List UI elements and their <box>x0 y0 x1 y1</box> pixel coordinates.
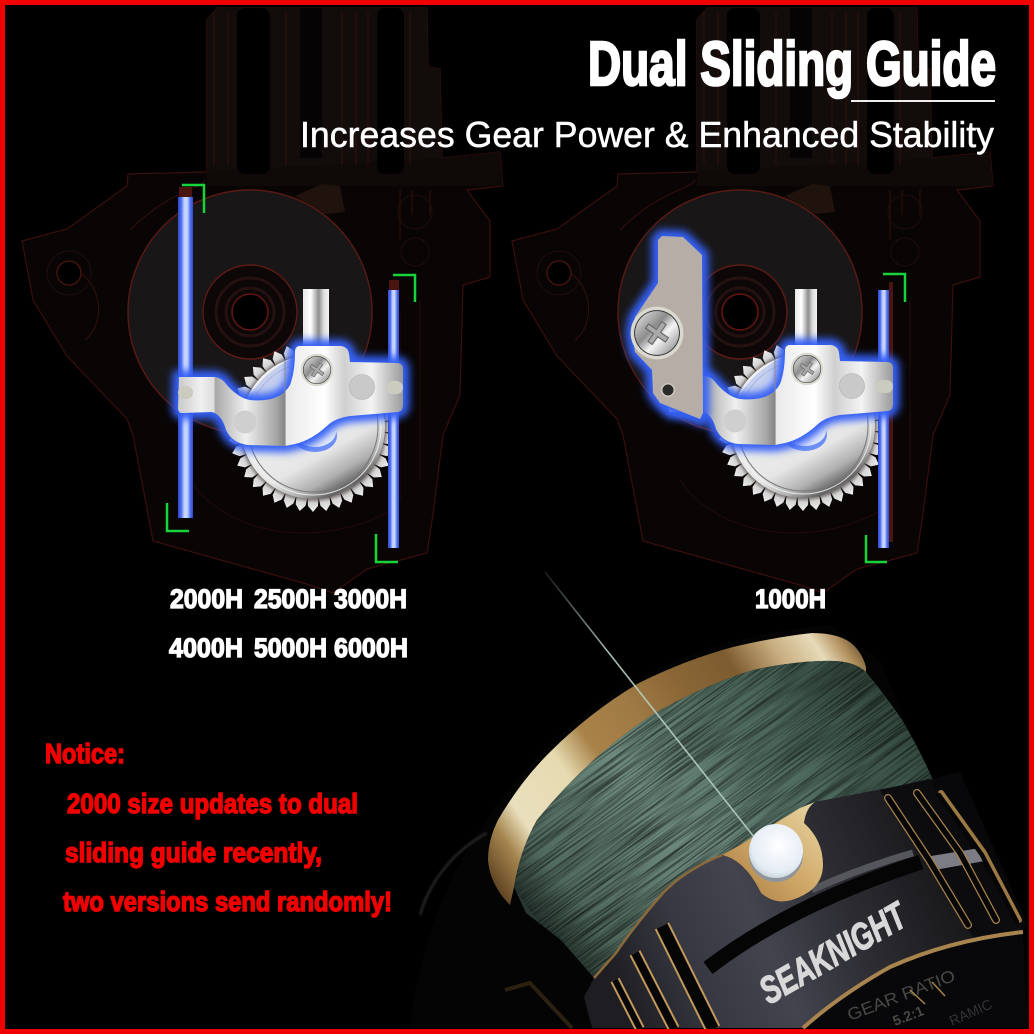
skirt dark stripe <box>708 862 921 968</box>
bracket marker bottom <box>866 535 887 562</box>
left panel: dual guide mechanism <box>167 185 415 562</box>
SeaKnight logo: SEAKNIGHT <box>752 894 916 1013</box>
subtitle: Increases Gear Power & Enhanced Stability <box>300 114 994 155</box>
gear ratio value: 5.2:1 <box>890 1002 926 1029</box>
left slots <box>615 926 713 1029</box>
skirt light stripe <box>812 853 913 890</box>
notice <box>45 738 392 917</box>
brass collar rim <box>803 932 1023 1028</box>
right guide rod shadow <box>389 280 399 292</box>
model labels, dual guide: 4000H <box>169 633 243 663</box>
line guide brass notch <box>722 802 823 901</box>
lower collar <box>803 932 1028 1028</box>
gear ratio label: GEAR RATIO <box>845 966 958 1025</box>
grey cross band <box>925 848 990 870</box>
model labels, dual guide: 6000H <box>334 633 408 663</box>
left guide rod shadow <box>179 187 192 199</box>
notice: sliding guide recently, <box>65 837 322 868</box>
gear <box>718 341 888 511</box>
right slots <box>888 793 1019 925</box>
right panel: single guide mechanism <box>631 236 905 562</box>
right guide rod <box>388 290 399 548</box>
ceramic label: RAMIC <box>947 996 994 1029</box>
model labels, dual guide: 3000H <box>334 584 407 614</box>
model label, single guide: 1000H <box>755 584 826 614</box>
title underline <box>851 100 995 102</box>
bracket marker top left <box>182 185 204 213</box>
sliding bracket <box>668 345 893 445</box>
braided fishing line <box>514 660 933 978</box>
bracket marker top <box>883 274 905 302</box>
spool photo <box>410 572 1028 1029</box>
model labels, dual guide <box>169 584 408 663</box>
bracket marker bottom left <box>167 503 189 531</box>
left guide rod <box>178 197 193 518</box>
centre shaft <box>303 289 329 349</box>
spool skirt body <box>584 780 1023 1028</box>
lower left brass edge <box>505 983 572 1028</box>
notice: Notice: <box>45 738 125 769</box>
brass upper edge <box>594 855 722 978</box>
rear arc <box>420 833 487 915</box>
line roller <box>749 824 803 882</box>
skirt right dark area <box>880 772 1028 940</box>
dark reel body behind spool <box>410 625 1028 1028</box>
bracket marker bottom right <box>376 534 398 562</box>
pivot plate <box>631 236 703 419</box>
reel housing, left <box>22 8 503 593</box>
rod shadow <box>889 282 893 542</box>
centre shaft <box>795 289 817 349</box>
guide rod <box>878 290 889 548</box>
sliding bracket <box>178 346 403 446</box>
reel housing, right <box>512 8 993 593</box>
fishing line <box>545 572 758 842</box>
model labels, dual guide: 5000H <box>254 633 327 663</box>
notice: 2000 size updates to dual <box>67 788 358 819</box>
model labels, dual guide: 2500H <box>254 584 327 614</box>
bracket marker top right <box>393 275 415 302</box>
model labels, dual guide: 2000H <box>170 584 243 614</box>
brass highlight on collar text <box>910 982 945 1004</box>
spool front ring <box>488 633 866 905</box>
notice: two versions send randomly! <box>63 886 392 917</box>
gear <box>228 342 398 512</box>
